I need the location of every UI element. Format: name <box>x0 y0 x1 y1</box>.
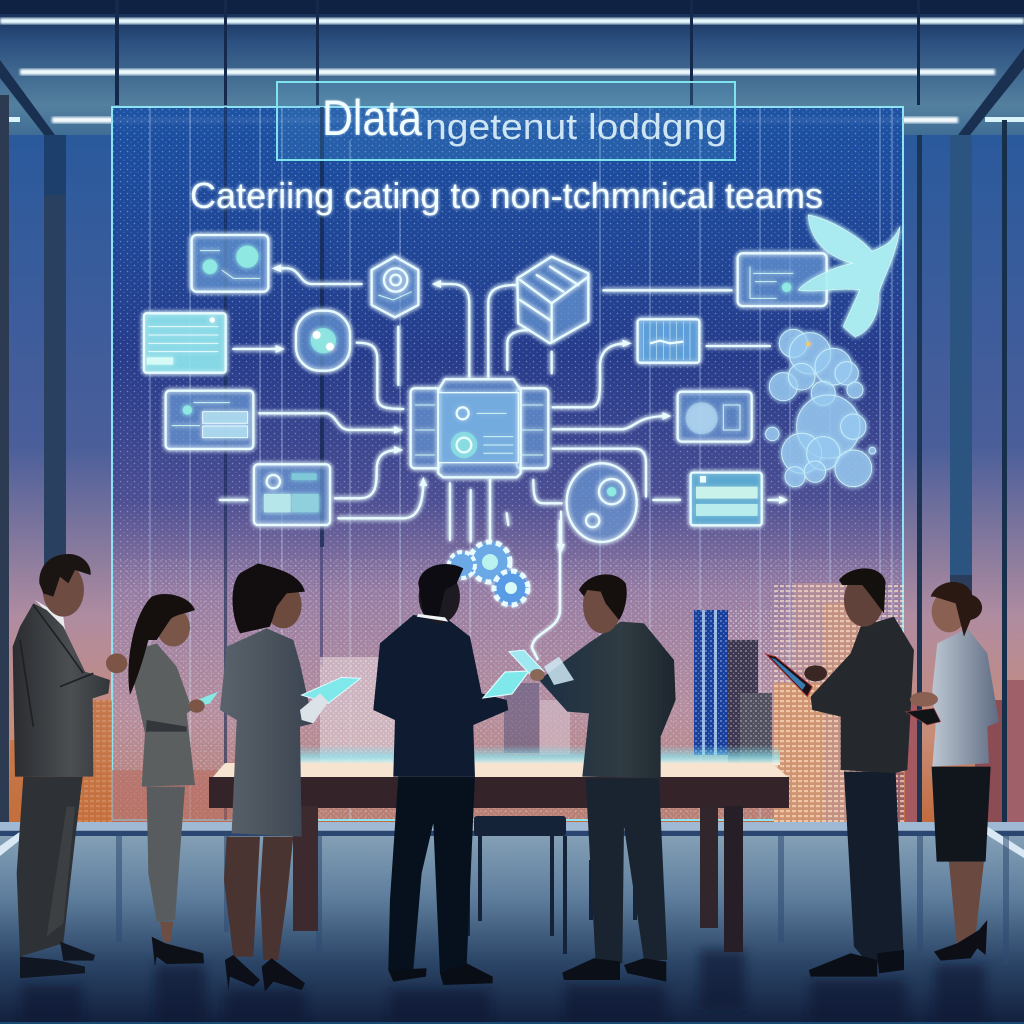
gears and connector below hub <box>449 520 560 660</box>
arrow from hub to gear hexagon <box>435 284 469 377</box>
people: left group <box>13 554 508 992</box>
arrow from panel card <box>338 480 423 518</box>
arrow to circular node <box>233 345 282 352</box>
person: woman in light blazer <box>906 582 999 961</box>
node: data card <box>166 391 253 449</box>
arrow to chart card <box>275 268 362 284</box>
arrow to striped card <box>553 343 628 407</box>
icon: hummingbird <box>798 215 900 337</box>
person: woman with ponytail <box>128 594 218 967</box>
person: man with tablet centre right <box>509 574 676 982</box>
connector from hub to cube <box>398 285 530 385</box>
title box: Dlata <box>322 90 422 146</box>
node: table card <box>691 473 762 525</box>
tablet held by navy-suit man <box>483 671 529 698</box>
title box: ngetenut loddgng <box>425 106 727 147</box>
person: man in grey suit <box>13 554 127 978</box>
vertical arrows under hub <box>450 480 508 542</box>
arrow from data card to hub <box>259 413 400 430</box>
bottom edge <box>0 1022 1024 1024</box>
city skyline <box>10 583 1024 825</box>
chair <box>466 816 637 954</box>
flow diagram: left half <box>144 235 548 542</box>
glass display panel <box>112 107 903 820</box>
node: striped card <box>638 319 699 363</box>
person: man in navy suit seen from behind <box>373 564 508 985</box>
hub device <box>411 379 548 477</box>
arrow to dial card <box>553 416 668 429</box>
connectors from panel card to hub <box>220 450 400 500</box>
person: man in dark jacket <box>766 568 914 977</box>
ceiling beams and lights <box>0 0 1024 140</box>
connector from cube <box>552 290 770 373</box>
node: chart card <box>192 235 268 292</box>
window mullions <box>0 95 1007 825</box>
flow diagram: right half <box>517 215 900 550</box>
icon: crystal flower cluster <box>766 329 876 487</box>
floor reflections <box>0 822 1024 1024</box>
people: right group <box>509 568 999 982</box>
node: chart card upper <box>738 253 827 306</box>
node: 3D cube <box>517 257 588 343</box>
table <box>209 745 789 952</box>
node: form card <box>144 313 226 373</box>
connector to hub <box>357 343 403 409</box>
node: panel card <box>254 464 330 525</box>
node: gear hexagon <box>372 257 418 317</box>
title box <box>277 82 735 160</box>
node: circular cluster <box>296 311 350 371</box>
node: dial card <box>678 392 752 442</box>
person: woman with curly hair in dress <box>220 563 361 992</box>
title box: Dlata <box>322 90 422 146</box>
arrow from badge to hub <box>533 480 562 550</box>
connector to table card <box>553 449 785 500</box>
node: round gear badge <box>567 463 637 542</box>
subtitle: Cateriing cating to non-tchmnical teams <box>190 175 823 216</box>
